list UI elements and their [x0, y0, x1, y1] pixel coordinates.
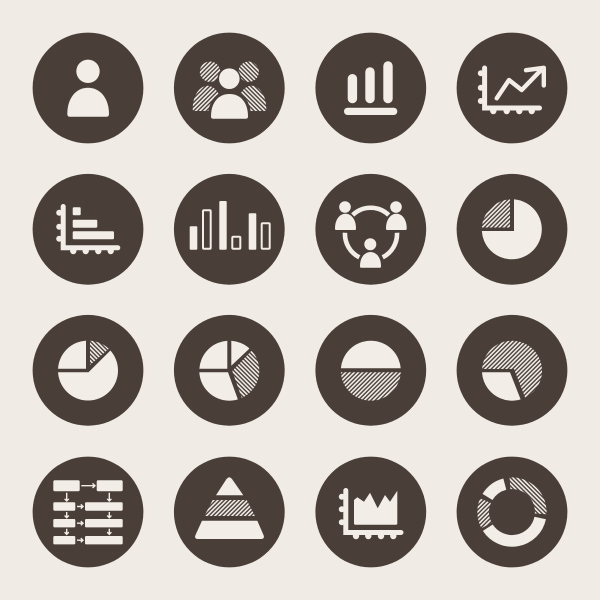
- connecting ring arcs: [345, 208, 397, 257]
- badge circle: [315, 33, 426, 143]
- badge circle: [315, 174, 426, 285]
- icon: rising bar chart: [315, 33, 426, 143]
- hatched slice: [90, 340, 109, 365]
- hatched bottom half: [340, 372, 401, 401]
- icon: mixed column chart: [174, 174, 285, 285]
- large slice: [58, 350, 118, 400]
- solid top half: [340, 340, 401, 368]
- badge circle: [33, 457, 143, 567]
- icon: flowchart: [33, 457, 143, 567]
- axis ticks: [478, 70, 535, 114]
- icon: pyramid: [174, 457, 285, 567]
- bottom bar: [73, 231, 114, 239]
- center head: [219, 68, 240, 89]
- outlined column 2: [203, 210, 211, 249]
- solid column 3: [219, 201, 227, 250]
- pyramid bottom tier: [195, 521, 264, 539]
- middle bar: [73, 220, 97, 228]
- badge circle: [457, 33, 567, 143]
- bottom person: [360, 238, 381, 268]
- solid column 1: [190, 226, 197, 250]
- top-right hatched segment: [510, 483, 541, 514]
- badge circle: [33, 174, 143, 285]
- trend arrow: [497, 68, 544, 98]
- icon: single person: [33, 33, 143, 143]
- pyramid top tier: [216, 477, 243, 495]
- badge circle: [457, 315, 567, 426]
- icon: donut chart: [457, 457, 567, 567]
- center body: [211, 94, 248, 119]
- hatched quarter slice: [482, 199, 510, 228]
- solid slice: [482, 372, 521, 401]
- badge circle: [457, 174, 567, 285]
- badge circle: [33, 33, 143, 143]
- icon: pie chart mostly hatched: [457, 315, 567, 426]
- right hatched body: [237, 86, 266, 111]
- flow boxes: [53, 480, 123, 544]
- bar 1: [348, 74, 357, 103]
- chart axes: [63, 206, 118, 248]
- chart axes: [485, 68, 540, 108]
- badge circle: [315, 315, 426, 426]
- icon: area chart: [315, 457, 426, 567]
- right person: [386, 201, 407, 230]
- outlined column 4: [232, 237, 240, 249]
- hatched large slice: [482, 341, 542, 401]
- left hatched body: [193, 86, 222, 111]
- bar 3: [383, 61, 393, 103]
- badge circle: [174, 315, 285, 426]
- hatched slice: [232, 351, 260, 398]
- baseline: [344, 108, 397, 115]
- badge circle: [174, 33, 285, 143]
- top bar: [73, 207, 81, 215]
- axis ticks: [56, 210, 114, 254]
- bottom slice: [199, 372, 238, 401]
- top-left slice: [199, 340, 228, 369]
- icon: pie chart four slices: [174, 315, 285, 426]
- person body: [67, 88, 109, 117]
- badge circle: [33, 315, 143, 426]
- person head: [76, 60, 100, 83]
- top-left slice: [58, 340, 86, 369]
- left person: [335, 201, 356, 230]
- solid column 5: [249, 213, 256, 250]
- icon: pie chart quarter: [457, 174, 567, 285]
- area shape: [354, 491, 397, 525]
- badge circle: [174, 457, 285, 567]
- badge circle: [315, 457, 426, 567]
- badge circle: [457, 457, 567, 567]
- bottom solid segment: [488, 518, 540, 541]
- right hatched head: [238, 61, 259, 82]
- left hatched head: [200, 61, 220, 82]
- icon: pie chart small slice: [33, 315, 143, 426]
- badge circle: [174, 174, 285, 285]
- top-right slice: [231, 340, 250, 366]
- icon: team network: [315, 174, 426, 285]
- icon: line chart with arrow: [457, 33, 567, 143]
- left hatched segment: [483, 501, 487, 526]
- pyramid hatched tier: [204, 500, 255, 516]
- flow arrows: [65, 483, 111, 542]
- axis ticks: [339, 494, 396, 539]
- icon: half pie chart: [315, 315, 426, 426]
- chart axes: [346, 490, 401, 532]
- solid slice: [482, 199, 542, 259]
- top-left solid segment: [488, 484, 505, 497]
- icon: group of people: [174, 33, 285, 143]
- outlined column 6: [262, 223, 270, 249]
- bar 2: [365, 67, 375, 103]
- icon: horizontal bar chart: [33, 174, 143, 285]
